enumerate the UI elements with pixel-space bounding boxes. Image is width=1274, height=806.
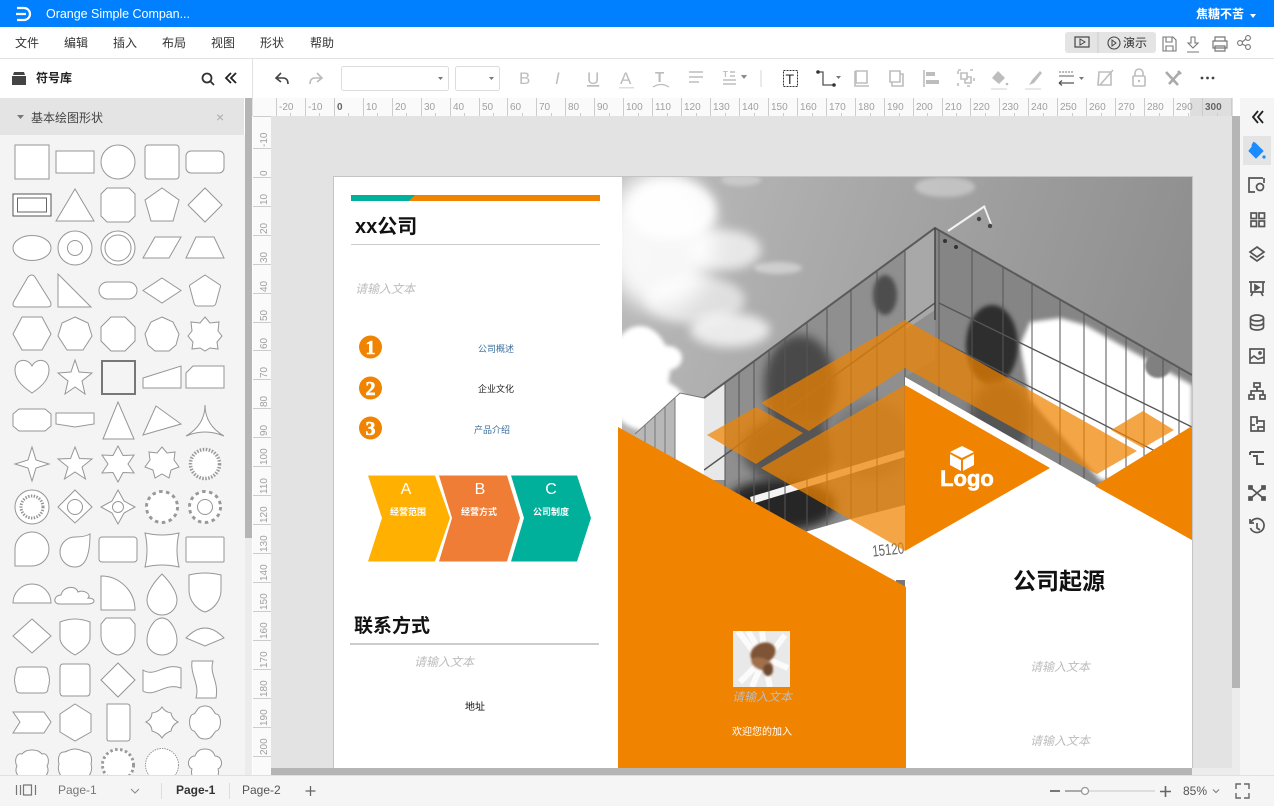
spacing icon: T [723,70,728,79]
sidebar shape library [0,135,245,782]
row 7 [13,402,224,439]
size select [456,66,500,90]
chevron C [511,476,591,562]
horizontal ruler: 90 [597,102,609,113]
text box icon [784,70,798,87]
document name: Orange Simple Compan... [46,7,190,21]
text format buttons [519,69,669,88]
horizontal ruler: 260 [1089,102,1106,113]
vertical ruler: 190 [259,709,270,726]
address: 地址 [465,700,485,713]
vertical ruler [253,116,271,776]
icon: org chart [1249,383,1265,399]
numbered list: 2 [366,378,376,400]
horizontal ruler: 290 [1176,102,1193,113]
redo icon [310,73,322,84]
horizontal ruler: 140 [742,102,759,113]
logo: Logo [940,466,994,491]
horizontal ruler: 10 [366,102,378,113]
dark ground strip [896,580,905,586]
welcome text: 欢迎您的加入 [732,725,792,738]
orange panel placeholder: 请输入文本 [732,690,794,704]
orange left panel [618,427,906,768]
row 9 [15,490,220,524]
edit icon [1098,70,1113,85]
numbered list: 企业文化 [478,383,514,394]
translucent orange lower triangle [761,385,905,551]
vertical ruler: 90 [259,424,270,436]
origin placeholder two: 请输入文本 [1030,734,1092,748]
vertical ruler: 50 [259,309,270,321]
menu bar: 形状 [260,36,284,50]
align-left icon [923,70,925,87]
icon: history [1250,519,1264,533]
tools icon [1166,71,1181,85]
separator lines [0,58,1274,59]
app logo [16,8,30,20]
icon: image [1250,349,1264,363]
horizontal ruler: 40 [453,102,465,113]
back icon [890,71,903,86]
menu bar: 视图 [211,35,235,50]
horizontal ruler: 220 [973,102,990,113]
chevron A [368,476,450,562]
chevron C: 公司制度 [533,506,569,517]
chevron C: C [545,481,557,498]
heading: company origin: 公司起源 [1013,568,1105,594]
symbol library header [0,59,252,98]
vertical ruler: 70 [259,366,270,378]
horizontal ruler: 210 [945,102,962,113]
page tab two: Page-2 [242,783,281,797]
vertical ruler: 80 [259,395,270,407]
horizontal ruler: -10 [308,102,323,113]
row 12 [13,618,224,655]
numbered list: 公司概述 [478,343,514,354]
horizontal ruler: 70 [539,102,551,113]
row 14 [13,704,220,741]
horizontal ruler: 100 [626,102,643,113]
menu bar: 插入 [113,36,137,50]
vertical ruler: 20 [259,222,270,234]
chevron A: A [401,481,412,498]
text format buttons: B [519,69,530,88]
heading rule [351,244,600,245]
team hands photo [733,631,790,687]
vertical ruler: 100 [259,448,270,465]
title bar [0,0,1274,27]
numbered list [359,336,514,440]
align icon [689,72,703,82]
horizontal ruler: 120 [684,102,701,113]
icon: fill, selected [1243,136,1271,165]
translucent orange right diamond [1111,411,1174,448]
present button group [1065,32,1156,53]
row 10 [15,532,224,567]
chevron B [439,476,520,562]
horizontal ruler: 190 [887,102,904,113]
horizontal ruler: 0 [337,102,343,113]
vertical ruler: 110 [259,478,270,494]
icon: floor plan [1251,417,1264,431]
sidebar section header: × [216,109,224,125]
document page [334,170,1192,768]
collapse icon [226,73,236,83]
more icon [1201,77,1214,79]
icon: database [1250,315,1264,330]
row 1 [15,145,224,179]
save icon [1163,37,1176,51]
row 13 [14,661,217,698]
left column header bar [351,195,600,201]
vertical ruler: 120 [259,506,270,523]
vertical ruler: 150 [259,593,270,610]
vertical ruler: 130 [259,535,270,552]
icon: cube [950,446,974,471]
clouds [605,170,975,431]
row 15 [16,748,222,782]
right glass facade [905,230,1192,485]
row 8 [15,446,220,482]
row 4 [13,274,220,307]
horizontal ruler: 150 [771,102,788,113]
print icon [1213,37,1227,51]
icon: page settings [1249,178,1264,192]
align bars [926,72,939,84]
menu bar [0,27,1274,58]
icon: grid [1251,213,1264,226]
font select [342,66,448,90]
roof edge [704,228,1192,398]
page selector: Page-1 [58,783,97,797]
heading: contact: 联系方式 [354,614,430,637]
text format buttons: A [620,69,632,88]
building photo [605,170,1192,590]
page selector [58,783,139,797]
heading: company: xx公司 [355,216,417,238]
left glass facade [704,251,935,532]
horizontal ruler: 270 [1118,102,1135,113]
numbered list: 产品介绍 [474,424,510,435]
vertical ruler: 30 [259,251,270,263]
download icon [1187,37,1199,52]
horizontal ruler: 180 [858,102,875,113]
horizontal ruler: 30 [424,102,436,113]
icon: mind map [1249,486,1265,500]
vertical ruler: 140 [259,564,270,581]
horizontal ruler: 60 [510,102,522,113]
contact rule [350,643,599,645]
translucent orange left diamond [707,407,803,464]
front icon [855,71,869,86]
horizontal ruler: 250 [1060,102,1077,113]
white diagonal section [905,377,1192,768]
chevron B: 经营方式 [461,506,497,517]
right tool panel [1240,98,1274,775]
add page [306,786,316,796]
numbered list: 1 [366,337,376,359]
search icon [202,74,214,85]
text format buttons: T [655,69,664,86]
vertical ruler: 200 [259,738,270,755]
horizontal ruler [253,98,1233,116]
canvas background [253,116,1233,776]
vertical ruler: 160 [259,622,270,639]
sidebar section header [0,98,244,135]
vertical ruler: 180 [259,680,270,697]
symbol library header: 符号库 [36,70,72,85]
roof lamp [943,206,992,249]
sign number: 15120 [871,540,905,561]
orange right triangle [1095,426,1192,540]
contact placeholder: 请输入文本 [414,655,476,669]
chevron A: 经营范围 [390,506,426,517]
horizontal ruler: 110 [655,102,671,113]
user dropdown arrow [1250,14,1256,18]
row 2 [13,188,222,222]
horizontal ruler: 280 [1147,102,1164,113]
horizontal ruler: 80 [568,102,580,113]
row 11 [13,573,221,615]
menu bar: 文件 [15,35,39,50]
horizontal ruler: 20 [395,102,407,113]
menu bar: 布局 [162,36,186,50]
low white building [634,392,704,475]
origin placeholder one: 请输入文本 [1030,660,1092,674]
vertical ruler: 0 [259,170,270,176]
active page tab: Page-1 [176,783,216,797]
horizontal ruler: 200 [916,102,933,113]
text format buttons: I [555,69,560,88]
spacing icon [723,70,747,84]
text box icon: T [786,71,794,87]
icon: presentation [1249,282,1265,296]
page view icon [16,785,36,795]
fill icon [991,71,1008,90]
vertical ruler: -10 [259,132,270,147]
lock icon [1133,69,1145,86]
vertical ruler: 170 [259,651,270,668]
connector icon [816,70,841,87]
menu bar: 编辑 [64,35,88,50]
horizontal ruler: 300 [1205,102,1222,113]
translucent orange upper band [761,320,1137,474]
row 5 [13,317,222,351]
icon: connector bar [1250,452,1264,464]
share icon [1238,36,1250,49]
sidebar scrollbar [245,98,252,775]
icon: layers [1250,247,1264,261]
horizontal ruler: 130 [713,102,730,113]
vertical ruler: 10 [259,193,270,205]
fullscreen icon [1236,784,1249,798]
collapse icon [1253,111,1263,123]
zoom controls [1050,784,1219,798]
vertical scrollbar [1232,116,1240,775]
user name: 焦糖不苦 [1196,6,1244,21]
library icon [12,72,26,85]
horizontal ruler: 160 [800,102,817,113]
line style icon [1059,72,1084,86]
orange logo triangle [905,385,1050,551]
horizontal ruler: 240 [1031,102,1048,113]
logo [940,446,994,491]
white floor [806,505,905,582]
vertical ruler: 40 [259,280,270,292]
placeholder text: 请输入文本 [355,282,417,296]
sky [622,177,1192,540]
zoom controls: 85% [1183,784,1207,798]
numbered list: 3 [366,418,376,440]
sidebar section header: 基本绘图形状 [31,110,103,125]
row 3 [13,231,224,265]
undo icon [276,73,288,84]
row 6 [15,360,224,394]
bottom status bar [0,775,1274,806]
chevron B: B [475,481,485,498]
text format buttons: U [587,69,599,88]
group icon [958,70,974,86]
vertical ruler: 60 [259,337,270,349]
main toolbar [252,59,1274,116]
horizontal ruler: 50 [482,102,494,113]
present button group: 演示 [1123,35,1147,50]
menu bar: 帮助 [310,36,334,50]
horizontal ruler: 230 [1002,102,1019,113]
horizontal ruler: -20 [279,102,294,113]
horizontal ruler: 170 [829,102,846,113]
line color icon [1025,71,1042,90]
horizontal scrollbar [271,768,1233,775]
